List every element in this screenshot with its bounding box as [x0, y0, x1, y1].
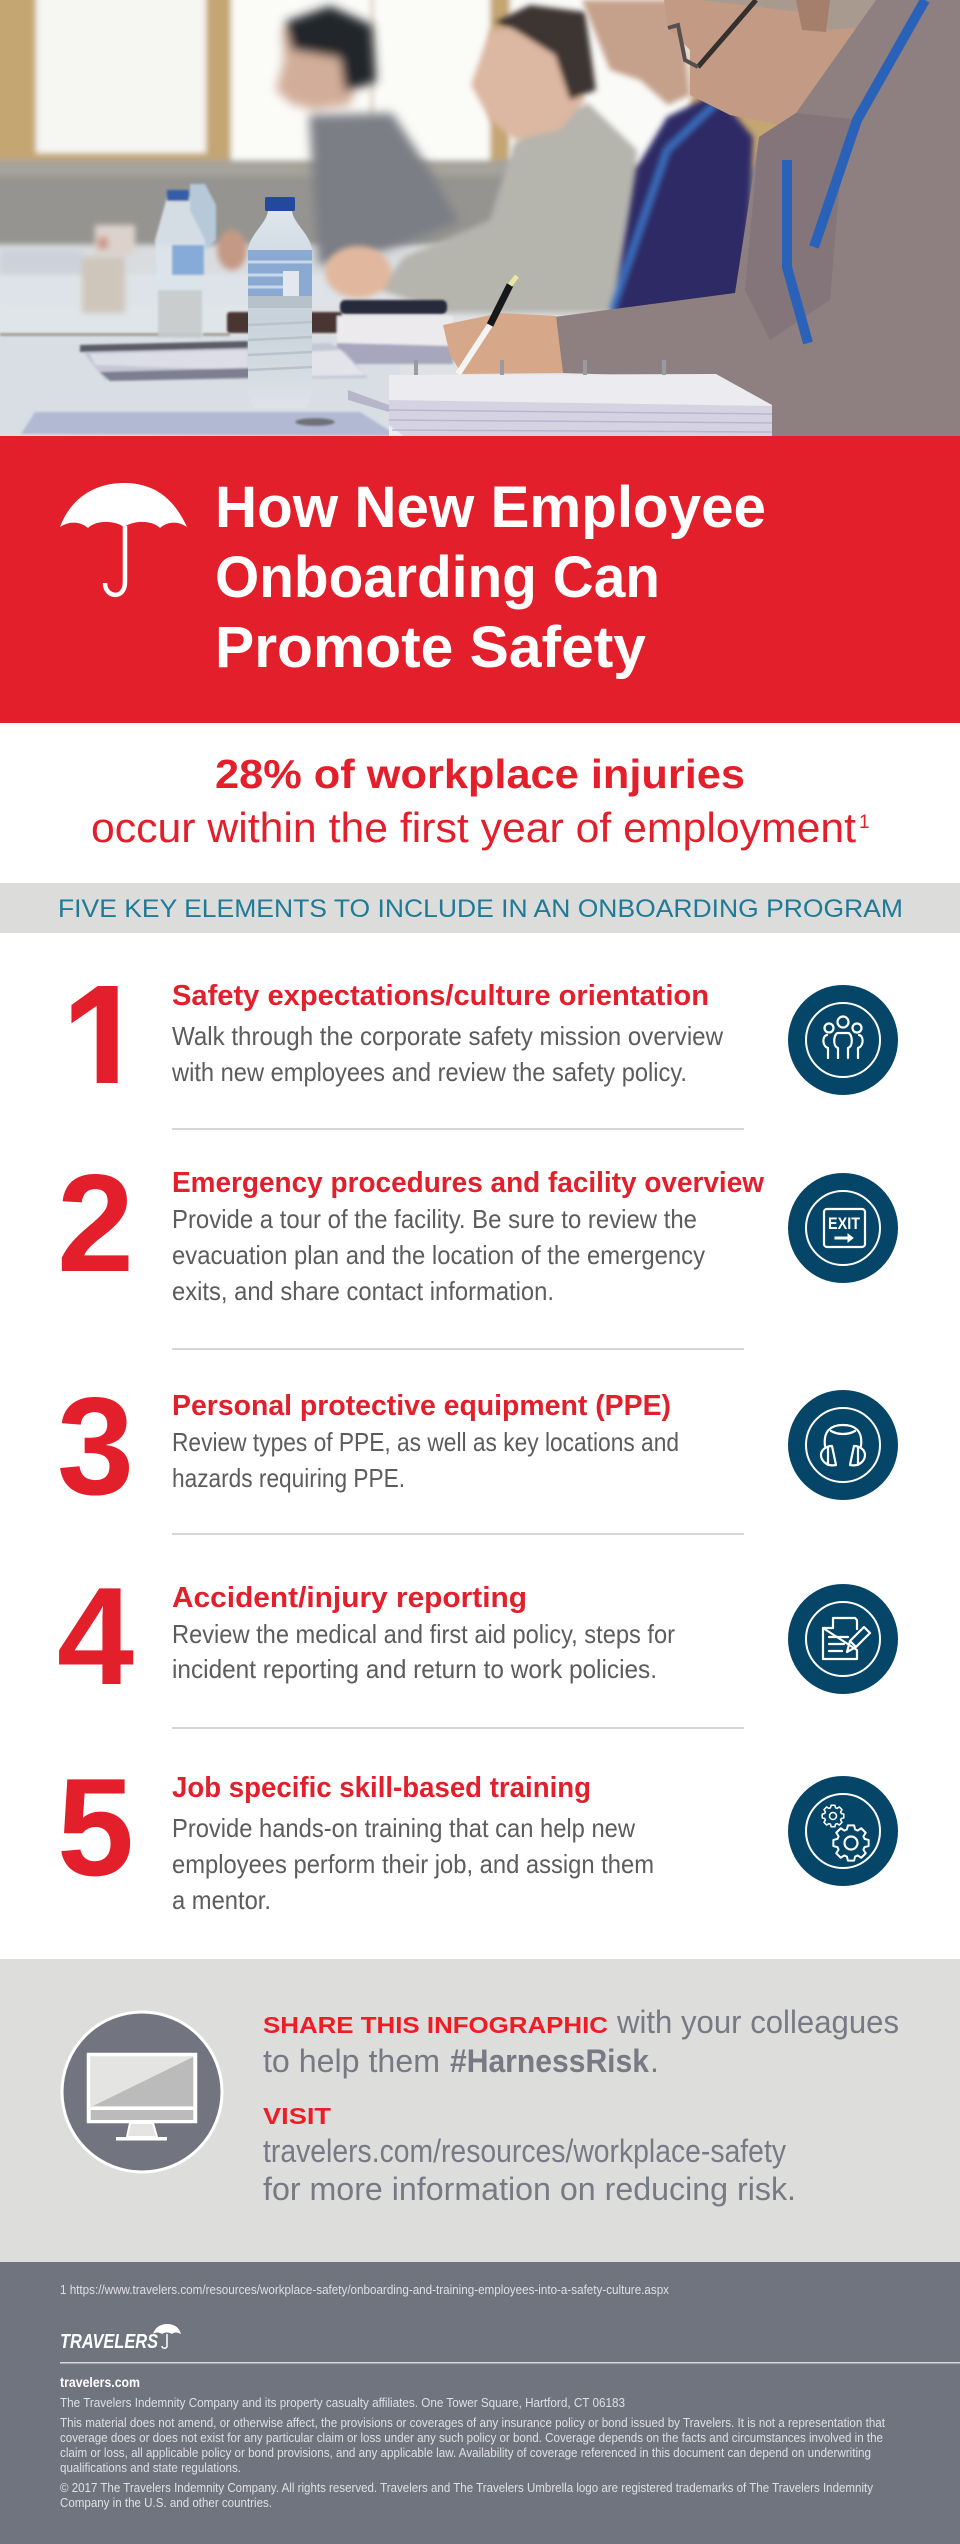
key statistic [91, 751, 870, 851]
title: How New Employee [215, 475, 766, 540]
legal text: This material does not amend, or otherwise affect, the provisions or coverages of any insurance policy or bond issued by Travelers. It is not a representation that [60, 2416, 885, 2430]
body 2: Provide a tour of the facility. Be sure to review the [172, 1204, 697, 1234]
icon: ear protectors [788, 1390, 898, 1500]
body 4 [172, 1619, 675, 1684]
legal text: claim or loss, all applicable policy or bond provisions, and any applicable law. Availability of coverage referenced in this document can depend on underwriting [60, 2446, 871, 2460]
body 2: evacuation plan and the location of the emergency [172, 1240, 705, 1270]
legal text: Company in the U.S. and other countries. [60, 2496, 272, 2510]
background person in light shirt [325, 5, 637, 313]
panel: red title banner [0, 436, 960, 723]
title [215, 475, 766, 680]
visit text: travelers.com/resources/workplace-safety [263, 2133, 786, 2169]
share text: to help them [263, 2043, 440, 2079]
body 4: Review the medical and first aid policy, steps for [172, 1619, 675, 1649]
divider 3 [172, 1533, 744, 1535]
body 5: a mentor. [172, 1885, 271, 1915]
key statistic: 28% of workplace injuries [215, 751, 745, 797]
heading 1: Safety expectations/culture orientation [172, 980, 709, 1012]
panel: share call to action [0, 1959, 960, 2262]
divider 2 [172, 1348, 744, 1350]
item 2: emergency procedures [57, 1146, 898, 1306]
key statistic: 1 [859, 812, 870, 833]
share text: . [650, 2043, 659, 2079]
panel: footer [0, 2262, 960, 2544]
legal text: The Travelers Indemnity Company and its property casualty affiliates. One Tower Square, Hartford, CT 06183 [60, 2396, 625, 2410]
body 3 [172, 1427, 679, 1493]
number 3: 3 [57, 1369, 134, 1524]
body 1: with new employees and review the safety policy. [171, 1057, 687, 1087]
legal text [60, 2374, 885, 2510]
third person in navy shirt with lanyard [582, 0, 753, 313]
divider 4 [172, 1727, 744, 1729]
share text [263, 2004, 899, 2079]
number 2: 2 [57, 1146, 134, 1301]
background person in grey shirt [276, 6, 459, 265]
share text: with your colleagues [616, 2004, 899, 2040]
share text: #HarnessRisk [450, 2043, 649, 2079]
body 2: exits, and share contact information. [172, 1276, 554, 1306]
title: Onboarding Can [215, 545, 660, 610]
legal text: coverage does or does not exist for any particular claim or loss under any such policy or bond. Coverage depends on the facts and circumstances involved in the [60, 2431, 883, 2445]
visit text [263, 2103, 796, 2207]
logo: Travelers: TRAVELERS [60, 2331, 159, 2353]
title: Promote Safety [215, 615, 646, 680]
icon: document and pencil [788, 1584, 898, 1694]
body 1 [171, 1021, 723, 1087]
icon: desktop monitor [62, 2012, 222, 2172]
footer rule [60, 2362, 960, 2364]
heading 5: Job specific skill-based training [172, 1772, 591, 1804]
legal text: qualifications and state regulations. [60, 2461, 241, 2475]
body 2 [172, 1204, 705, 1306]
body 5: employees perform their job, and assign them [172, 1849, 654, 1879]
number 4: 4 [57, 1559, 134, 1714]
body 5 [172, 1813, 654, 1915]
item 1: safety expectations [71, 984, 898, 1095]
heading 2: Emergency procedures and facility overview [172, 1167, 764, 1199]
key statistic: occur within the first year of employment [91, 804, 856, 851]
legal text: © 2017 The Travelers Indemnity Company. All rights reserved. Travelers and The Travelers Umbrella logo are registered trademarks of The Travelers Indemnity [60, 2481, 874, 2495]
table surface [0, 332, 231, 338]
number 5: 5 [57, 1750, 134, 1905]
visit text: for more information on reducing risk. [263, 2171, 796, 2207]
hero photo: seated employees at a training table [0, 0, 960, 437]
heading 4: Accident/injury reporting [172, 1582, 527, 1614]
item 3: personal protective equipment [57, 1369, 898, 1524]
visit text: VISIT [263, 2103, 331, 2129]
item 4: accident reporting [57, 1559, 898, 1714]
front open binder with pages [348, 360, 772, 437]
body 3: Review types of PPE, as well as key locations and [172, 1427, 679, 1457]
icon: three people [788, 985, 898, 1095]
footnote: 1 https://www.travelers.com/resources/workplace-safety/onboarding-and-training-employees-into-a-safety-culture.aspx [60, 2283, 670, 2297]
front man in taupe shirt with glasses, lanyard and pen [443, 0, 960, 437]
heading 3: Personal protective equipment (PPE) [172, 1390, 671, 1422]
icon: exit sign [788, 1173, 898, 1283]
body 5: Provide hands-on training that can help new [172, 1813, 635, 1843]
number 1: 1 [61, 950, 146, 1140]
body 3: hazards requiring PPE. [172, 1463, 405, 1493]
icon: exit sign: EXIT [828, 1214, 861, 1233]
icon: white umbrella [60, 483, 187, 595]
item 5: job specific training [57, 1750, 898, 1915]
legal text: travelers.com [60, 2374, 140, 2390]
divider 1 [172, 1128, 744, 1130]
background water bottles [155, 184, 216, 340]
icon: gears [788, 1776, 898, 1886]
share text: SHARE THIS INFOGRAPHIC [263, 2012, 608, 2038]
body 1: Walk through the corporate safety mission overview [172, 1021, 723, 1051]
foreground water bottle [248, 197, 312, 380]
section heading band: FIVE KEY ELEMENTS TO INCLUDE IN AN ONBOARDING PROGRAM [58, 895, 903, 923]
section heading band [0, 883, 960, 933]
background items: papers, mug and hands [0, 225, 247, 313]
second paper pile and dark items [21, 300, 453, 436]
body 4: incident reporting and return to work policies. [172, 1654, 657, 1684]
